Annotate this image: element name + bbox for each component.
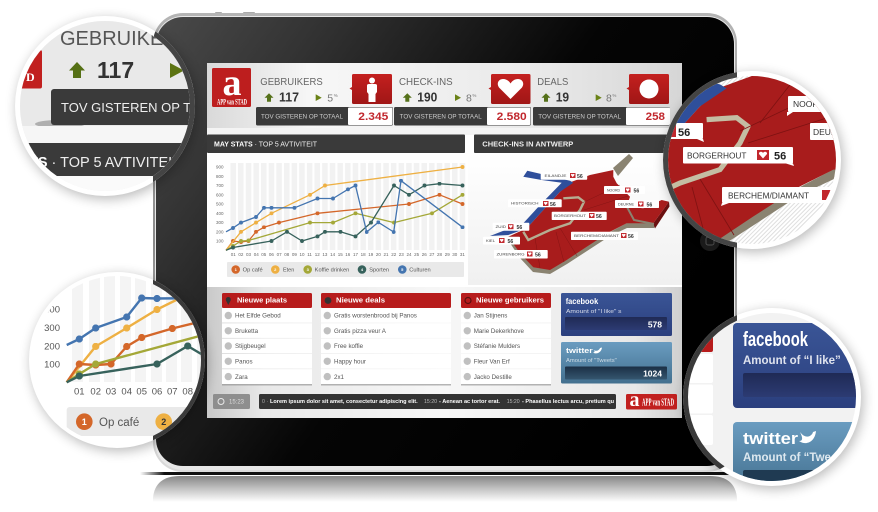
card: facebook: Amount of "I like" s [566, 309, 622, 315]
heading: check-ins in antwerp [474, 134, 682, 153]
chart legend: Eten [283, 268, 294, 274]
label: historisch zoomed: 56 [678, 127, 690, 139]
magnifier: bottom left chart detail: 06 [152, 386, 162, 397]
line chart: top 5 activiteit: 17 [353, 252, 358, 257]
total bar: 258 [646, 111, 665, 123]
panel: nieuwe plaats: Stijgbeugel [235, 343, 266, 350]
panel: nieuwe gebruikers: Nieuwe gebruikers [476, 296, 544, 305]
label: berchem zoomed: BERCHEM/DIAMANT [728, 190, 809, 200]
label: borgerhout: 56 [596, 214, 602, 220]
magnifier: top left header detail: GEBRUIKERS [60, 28, 191, 50]
label: deurne [615, 200, 659, 208]
panel: nieuwe deals: Free koffie [334, 343, 364, 350]
clock button: 15:23 [229, 400, 245, 406]
label: eilandje zoomed [722, 62, 760, 77]
line chart: top 5 activiteit: 12 [315, 252, 320, 257]
total bar: TOV GISTEREN OP TOTAAL [400, 114, 482, 120]
panel: nieuwe deals: Nieuwe deals [336, 296, 385, 305]
label: historisch zoomed [670, 123, 704, 142]
line chart: top 5 activiteit: 29 [445, 252, 450, 257]
label: eilandje: 56 [577, 174, 583, 180]
card: twitter [561, 342, 672, 384]
label: zurenborg [494, 250, 548, 259]
card: facebook: 578 [648, 319, 662, 329]
line chart: top 5 activiteit: 23 [399, 252, 404, 257]
stat: gebruikers: % [334, 93, 338, 98]
label: borgerhout [552, 212, 607, 220]
tablet reflection [153, 476, 737, 502]
panel: nieuwe deals: Happy hour [334, 358, 366, 366]
stat: deals [533, 74, 670, 126]
line chart: top 5 activiteit: 400 [216, 211, 224, 216]
panel: nieuwe deals: Gratis worstenbrood bij Panos [334, 313, 417, 320]
line chart: top 5 activiteit: 31 [460, 252, 465, 257]
line chart: top 5 activiteit: 100 [216, 239, 224, 244]
line chart: top 5 activiteit: 13 [322, 252, 328, 257]
magnifier: bottom left chart detail: 1 [82, 417, 87, 427]
dashboard screen [207, 62, 682, 418]
chart legend [227, 262, 464, 277]
label: deurne: DEURNE [618, 201, 634, 206]
map labels [483, 172, 659, 259]
line chart: top 5 activiteit: 14 [330, 252, 336, 257]
stat: gebruikers: 5 [327, 92, 333, 104]
total bar: TOV GISTEREN OP TOTAAL [538, 114, 622, 120]
panel: nieuwe plaats [222, 293, 312, 386]
label: berchem/diamant: 56 [628, 234, 634, 240]
stat: check-ins: % [472, 93, 476, 98]
panel: nieuwe gebruikers: Marie Dekerkhove [474, 328, 524, 335]
news ticker: - Phasellus lectus arcu, pretium qu [522, 399, 614, 405]
panel: nieuwe plaats: Het Elfde Gebod [235, 313, 281, 320]
magnifier: top left header detail: 117 [97, 57, 134, 83]
line chart: top 5 activiteit: 05 [261, 252, 267, 257]
label: zurenborg: 56 [535, 253, 541, 259]
clock button [213, 394, 250, 409]
line chart: top 5 activiteit: 03 [246, 252, 251, 257]
magnifier: top left header detail: TOV GISTEREN OP TOTAAL [61, 100, 232, 115]
line chart: top 5 activiteit: 28 [437, 252, 442, 257]
label: zurenborg: ZURENBORG [496, 252, 524, 256]
chart legend: 1 [235, 267, 238, 272]
magnifier: bottom left chart detail: 07 [167, 386, 178, 397]
label: kiel: KIEL [486, 238, 496, 243]
line chart: top 5 activiteit: 27 [429, 252, 435, 257]
line chart: top 5 activiteit: 20 [376, 252, 381, 257]
line chart: top 5 activiteit: 26 [422, 252, 427, 257]
label: historisch: 56 [550, 202, 556, 208]
magnifier: bottom left chart detail: Op café [99, 417, 139, 429]
total bar [256, 107, 393, 126]
label: kiel [483, 237, 520, 245]
card: facebook zoomed: Amount of “I like” [743, 355, 841, 367]
line chart: top 5 activiteit: 700 [216, 183, 224, 188]
label: historisch [508, 199, 562, 208]
line chart: top 5 activiteit: 01 [231, 252, 236, 257]
magnifier: bottom left chart detail: 02 [90, 386, 101, 397]
chart legend: Sporten [369, 268, 389, 274]
line chart: top 5 activiteit: 06 [269, 252, 274, 257]
panel: nieuwe plaats: Panos [235, 358, 253, 366]
stat: gebruikers [256, 74, 393, 126]
line chart: top 5 activiteit: 300 [216, 220, 224, 225]
total bar [533, 107, 670, 126]
heading: check-ins in antwerp: CHECK-INS IN ANTWERP [482, 141, 574, 148]
card: facebook zoomed [733, 323, 868, 408]
card: twitter zoomed: twitter [743, 429, 798, 448]
magnifier: bottom left chart detail: 400 [44, 304, 60, 316]
panel: nieuwe deals: Gratis pizza veur A [334, 328, 387, 335]
news ticker: 15:20 [507, 399, 520, 405]
panel: nieuwe gebruikers: Fleur Van Erf [474, 358, 510, 366]
label: eilandje [541, 172, 587, 180]
logo: App van Stad: APP van STAD [217, 96, 247, 106]
heading: may stats: MAY STATS · TOP 5 AVTIVITEIT [214, 141, 318, 148]
logo: small app van stad [626, 389, 677, 411]
magnifier: bottom left chart detail [29, 272, 248, 451]
news ticker: - Aenean ac tortor erat. [439, 399, 501, 405]
panel: nieuwe plaats: Zara [235, 374, 248, 381]
magnifier: top left header detail: TS · TOP 5 AVTIVITEIT [29, 155, 181, 171]
stat: check-ins [394, 74, 531, 126]
line chart: top 5 activiteit [216, 163, 465, 257]
panel: nieuwe gebruikers: Stéfanie Mulders [474, 343, 520, 350]
line chart: top 5 activiteit: 09 [292, 252, 297, 257]
panel: header statistics [207, 62, 682, 135]
stat: deals: 19 [556, 90, 569, 104]
magnifier: bottom left chart detail: 200 [44, 342, 60, 352]
chart legend: 3 [307, 267, 310, 272]
label: borgerhout zoomed [683, 147, 794, 166]
line chart: top 5 activiteit: 02 [238, 252, 244, 257]
panel: nieuwe plaats: Bruketta [235, 328, 259, 335]
line chart: top 5 activiteit: 10 [299, 252, 305, 257]
line chart: top 5 activiteit: 15 [338, 252, 343, 257]
card: twitter zoomed [733, 422, 852, 481]
line chart: top 5 activiteit: 16 [345, 252, 351, 257]
label: deurne zoomed: DEURNE [813, 127, 849, 137]
chart legend: 2 [274, 267, 277, 272]
magnifier: top right map detail [658, 68, 850, 258]
magnifier: bottom left chart detail: 300 [44, 323, 60, 334]
magnifier: bottom left chart detail: 09 [198, 386, 208, 397]
label: noord [604, 186, 645, 194]
logo: small app van stad: APP van STAD [642, 398, 674, 408]
line chart: top 5 activiteit: 24 [406, 252, 412, 257]
label: zuid: 56 [516, 225, 522, 231]
stat: gebruikers: 117 [279, 90, 299, 104]
card: facebook: facebook [566, 297, 599, 306]
label: zuid [493, 223, 529, 231]
magnifier: bottom left chart detail: 04 [121, 386, 132, 397]
line chart: top 5 activiteit: 18 [361, 252, 366, 257]
news ticker [259, 394, 616, 409]
total bar: 2.345 [358, 111, 388, 123]
total bar: 2.580 [497, 111, 527, 123]
label: noord zoomed: NOORD [793, 99, 825, 109]
news ticker: Lorem ipsum dolor sit amet, consectetur adipiscing elit. [270, 399, 418, 405]
card: twitter: Amount of "Tweets" [566, 358, 617, 364]
card: facebook zoomed: facebook [743, 329, 809, 351]
label: noord: NOORD [607, 187, 620, 192]
chart legend: 5 [401, 267, 404, 272]
line chart: top 5 activiteit: 900 [216, 165, 224, 170]
label: borgerhout zoomed: 56 [774, 150, 786, 162]
total bar: TOV GISTEREN OP TOTAAL [261, 114, 344, 120]
panel: footer background [207, 285, 682, 418]
stat: check-ins: 8 [466, 92, 472, 104]
news ticker: 0 · [262, 399, 268, 405]
chart legend: Culturen [409, 268, 431, 274]
card: twitter zoomed: Amount of “Tweets” [743, 452, 853, 464]
label: historisch: HISTORISCH [511, 201, 539, 206]
line chart: top 5 activiteit: 200 [216, 229, 224, 234]
icon: circle badge [626, 74, 669, 104]
label: deurne zoomed [810, 123, 834, 140]
label: borgerhout zoomed: BORGERHOUT [687, 150, 746, 160]
label: borgerhout: BORGERHOUT [554, 213, 587, 218]
tablet body [140, 12, 750, 475]
line chart: top 5 activiteit: 500 [216, 202, 224, 207]
panel: nieuwe deals [321, 293, 451, 386]
magnifier: top left header detail [10, 12, 197, 206]
label: eilandje: EILANDJE [544, 173, 567, 178]
panel: nieuwe gebruikers: Jan Stijnens [474, 313, 507, 320]
line chart: top 5 activiteit: 07 [277, 252, 282, 257]
line chart: top 5 activiteit: 19 [368, 252, 374, 257]
line chart: top 5 activiteit: 800 [216, 174, 224, 179]
line chart: top 5 activiteit: 22 [391, 252, 397, 257]
magnifier: bottom left chart detail: 100 [44, 360, 60, 370]
card: twitter: twitter [566, 346, 593, 355]
label: deurne: 56 [646, 202, 652, 208]
map: antwerp districts [468, 153, 682, 285]
line chart: top 5 activiteit: 600 [216, 192, 224, 197]
panel: nieuwe plaats: Nieuwe plaats [237, 296, 287, 305]
stat: deals: % [612, 93, 616, 98]
stat: check-ins: 190 [417, 90, 437, 104]
heading: may stats [207, 134, 465, 153]
chart legend: 4 [361, 267, 364, 272]
total bar [394, 107, 531, 126]
logo: App van Stad: a [222, 62, 242, 104]
news ticker: 15:20 [424, 399, 437, 405]
stat: check-ins: CHECK-INS [399, 76, 453, 88]
card: facebook [561, 293, 672, 336]
magnifier: bottom left chart detail: 05 [136, 386, 147, 397]
magnifier: bottom left chart detail: 03 [106, 386, 116, 397]
label: berchem zoomed [721, 187, 832, 206]
logo: small app van stad: a [630, 389, 640, 411]
magnifier: bottom left chart detail: 2 [161, 417, 166, 427]
line chart: top 5 activiteit: 30 [452, 252, 458, 257]
chart legend: Op café [243, 268, 263, 274]
stat: gebruikers: GEBRUIKERS [260, 76, 323, 88]
line chart: top 5 activiteit: 25 [414, 252, 420, 257]
card: twitter: 1024 [643, 368, 662, 378]
stat: deals: DEALS [537, 76, 568, 88]
panel: nieuwe deals: 2x1 [334, 374, 345, 381]
magnifier: bottom left chart detail: 01 [74, 386, 85, 397]
label: noord zoomed [787, 96, 821, 116]
panel: nieuwe gebruikers: Jacko Destille [474, 374, 512, 381]
chart legend: Koffie drinken [315, 268, 349, 274]
magnifier: bottom right social detail [683, 308, 868, 494]
line chart: top 5 activiteit: 04 [254, 252, 259, 257]
label: noord: 56 [634, 188, 639, 194]
magnifier: bottom left chart detail: Eten [180, 417, 204, 429]
label: zuid: ZUID [496, 224, 506, 229]
magnifier: top left header detail: D [26, 70, 35, 84]
icon: home button [700, 231, 720, 251]
magnifier: bottom left chart detail: 08 [182, 386, 193, 397]
line chart: top 5 activiteit: 11 [307, 252, 312, 257]
label: kiel: 56 [508, 239, 513, 245]
icon: heart [488, 74, 530, 104]
panel: nieuwe gebruikers [461, 293, 551, 386]
label: berchem/diamant: BERCHEM/DIAMANT [574, 233, 620, 238]
label: berchem/diamant [571, 232, 638, 240]
line chart: top 5 activiteit: 08 [284, 252, 290, 257]
label: eilandje zoomed: 56 [736, 65, 748, 77]
logo: App van Stad [212, 62, 251, 107]
line chart: top 5 activiteit: 21 [383, 252, 389, 257]
icon: person [350, 74, 392, 104]
stat: deals: 8 [606, 92, 612, 104]
